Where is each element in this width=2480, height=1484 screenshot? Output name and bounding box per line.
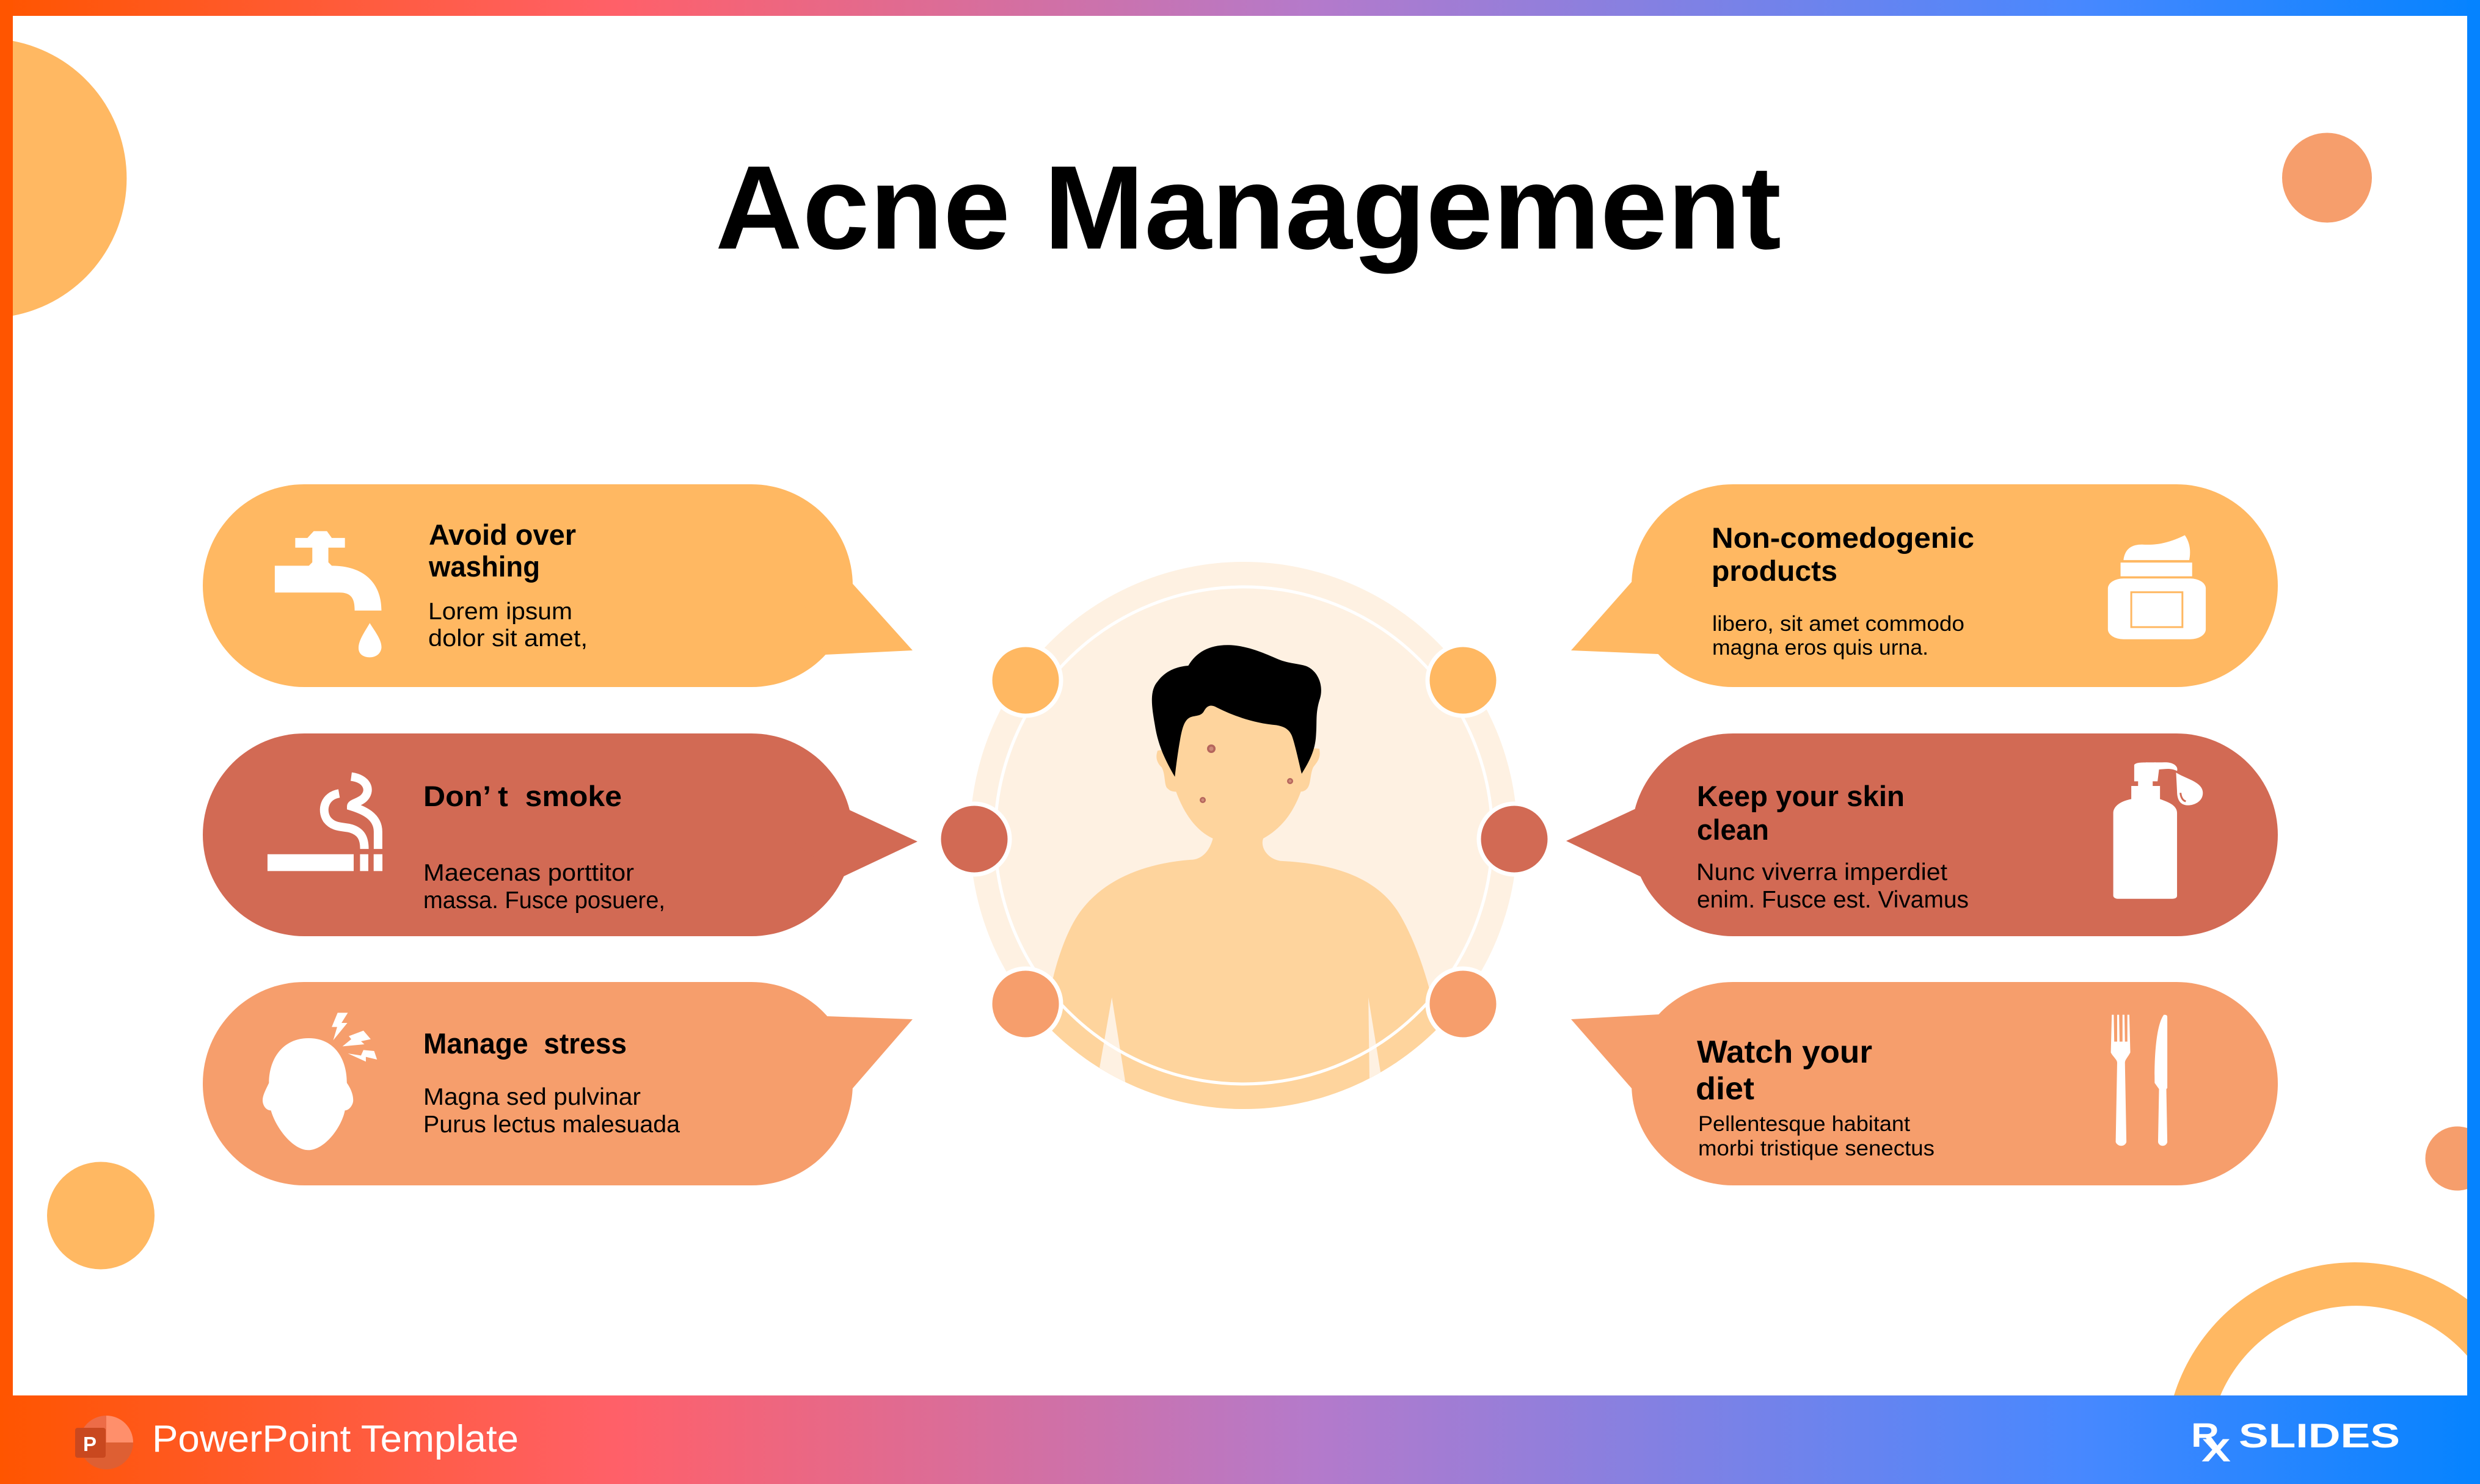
icon: PowerPoint logo: P [83, 1433, 97, 1455]
icon: cream jar [2108, 535, 2206, 639]
icon: stressed head [263, 1013, 377, 1150]
logo: RX Slides [2191, 1416, 2400, 1469]
top gradient bar [0, 0, 2480, 16]
body text [428, 598, 588, 652]
speech bubble [203, 733, 917, 936]
speech bubble [203, 484, 913, 687]
body text: Maecenas porttitor [423, 860, 634, 886]
icon: pump bottle [2113, 762, 2203, 899]
heading [1697, 780, 1905, 846]
panel: manage stress [203, 982, 913, 1185]
panel: keep your skin clean [1566, 733, 2278, 936]
icon: PowerPoint logo [75, 1416, 133, 1469]
body text: Pellentesque habitant [1698, 1112, 1910, 1136]
connector dots [939, 645, 1550, 1039]
heading: Avoid over [429, 518, 576, 551]
person with acne [1052, 645, 1436, 1109]
body text: massa. Fusce posuere, [423, 887, 665, 914]
heading: Non-comedogenic [1712, 522, 1974, 554]
icon: fork and knife [2111, 1015, 2167, 1146]
heading: Keep your skin [1697, 780, 1905, 812]
speech bubble [203, 982, 913, 1185]
heading [1712, 522, 1974, 587]
heading: diet [1696, 1071, 1754, 1107]
panel: avoid over washing [203, 484, 913, 687]
body text: Nunc viverra imperdiet [1696, 859, 1947, 886]
body text [1696, 859, 1969, 913]
body text: magna eros quis urna. [1712, 636, 1928, 660]
icon: cigarette [268, 777, 382, 871]
heading: washing [428, 550, 540, 583]
speech bubble [1571, 982, 2278, 1185]
body text [1712, 612, 1964, 660]
logo: RX Slides: SLIDES [2239, 1416, 2400, 1455]
body text [1698, 1112, 1935, 1160]
body text: libero, sit amet commodo [1712, 612, 1964, 636]
body text [423, 860, 665, 914]
body text: enim. Fusce est. Vivamus [1697, 887, 1969, 913]
title: Acne Management [715, 141, 1781, 274]
heading: Don’ t smoke [423, 780, 622, 812]
footer label: PowerPoint Template [152, 1418, 519, 1460]
panel: watch your diet [1571, 982, 2278, 1185]
background disc [970, 562, 1517, 1109]
body text: Purus lectus malesuada [423, 1111, 680, 1138]
body text [423, 1084, 680, 1138]
heading: Manage stress [423, 1027, 627, 1060]
body text: dolor sit amet, [428, 625, 588, 652]
body text: Magna sed pulvinar [423, 1084, 641, 1110]
right border [2467, 0, 2480, 1484]
white ring [995, 587, 1492, 1084]
logo: RX Slides: X [2201, 1433, 2231, 1469]
speech bubble [1571, 484, 2278, 687]
heading [1696, 1035, 1872, 1107]
heading: clean [1697, 813, 1769, 846]
panel: non-comedogenic products [1571, 484, 2278, 687]
heading: Watch your [1697, 1035, 1872, 1070]
speech bubble [1566, 733, 2278, 936]
heading [428, 518, 576, 583]
body text: morbi tristique senectus [1698, 1137, 1935, 1160]
heading: products [1712, 555, 1837, 587]
central illustration [939, 562, 1550, 1136]
body text: Lorem ipsum [428, 598, 572, 625]
left border [0, 0, 13, 1484]
panel: don't smoke [203, 733, 917, 936]
icon: water tap [275, 531, 382, 657]
logo: RX Slides: R [2191, 1416, 2219, 1454]
footer bar [0, 1395, 2480, 1484]
